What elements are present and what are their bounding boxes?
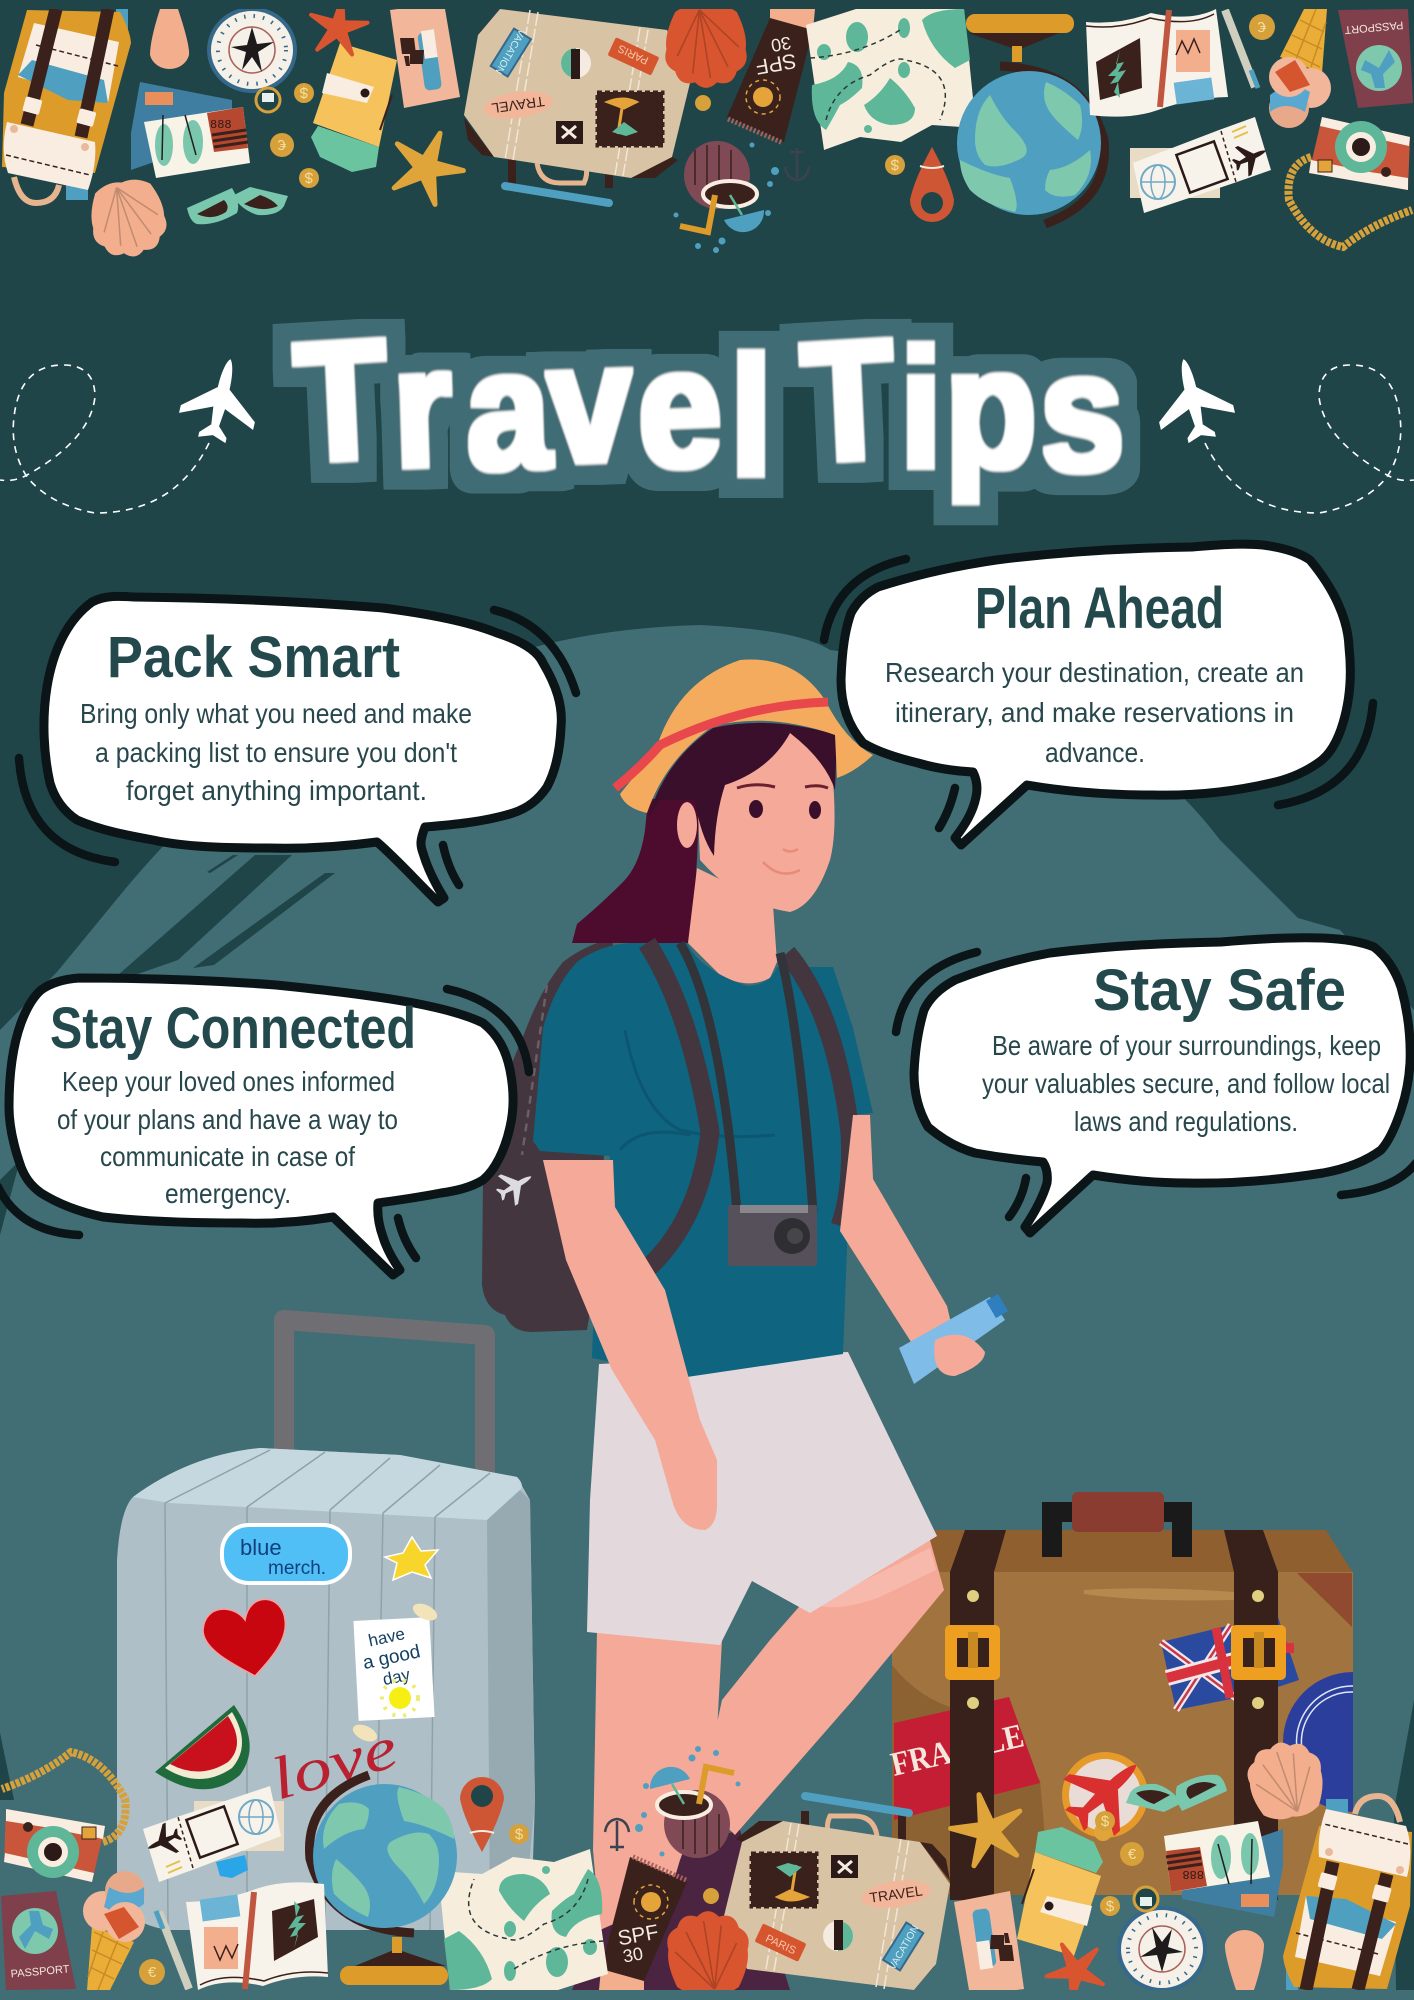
icon: pencil	[1225, 10, 1258, 88]
speech bubble: pack smart	[19, 596, 576, 902]
icon: coconut drink	[635, 1746, 740, 1858]
icon: camera	[1288, 117, 1412, 247]
speech bubble: plan ahead	[824, 544, 1373, 845]
icon: sunscreen tube	[727, 9, 815, 143]
luggage body	[117, 1448, 535, 1930]
icon: compass	[207, 7, 297, 112]
brown suitcase	[887, 1492, 1353, 1900]
speech bubble: stay safe	[896, 938, 1414, 1233]
icon: boarding pass	[141, 1786, 284, 1882]
speech bubble: plan ahead: advance.	[1045, 737, 1145, 768]
icon: camera	[2, 1752, 126, 1882]
icon: coins: €	[148, 1964, 157, 1981]
icon: gold starfish	[392, 130, 466, 207]
long hair	[572, 790, 700, 943]
speech bubble: stay connected: communicate in case of	[100, 1141, 355, 1172]
icon: beach postcard	[1164, 1821, 1283, 1917]
icon: anchor	[785, 148, 809, 180]
speech bubble: plan ahead: itinerary, and make reservations in	[895, 697, 1294, 728]
icon: orange shell	[665, 4, 747, 88]
background hill	[0, 625, 1414, 2000]
icon: wallet	[311, 43, 397, 172]
icon: ice cream	[1269, 9, 1331, 128]
icon: coins: $	[304, 169, 313, 186]
icon: sunscreen tube: SPF	[754, 49, 798, 78]
icon: anchor	[605, 1819, 629, 1851]
speech bubble: stay connected: emergency.	[165, 1178, 291, 1209]
icon: location pin	[910, 147, 954, 222]
speech bubble: stay connected: Stay Connected	[50, 996, 416, 1061]
icon: coins: $	[515, 1826, 524, 1843]
icon: boarding pass	[1130, 117, 1273, 213]
icon: backpack plane charm	[490, 1162, 540, 1210]
sticker: fragile	[887, 1697, 1040, 1820]
icon: map	[438, 1849, 608, 1990]
icon: suitcase with stickers: VACATION	[493, 27, 527, 75]
sticker: fragile: FRAGILE	[887, 1717, 1027, 1784]
icon: peach shell	[91, 180, 166, 256]
speech bubble: pack smart: a packing list to ensure you don't	[95, 737, 457, 768]
strap rivets	[967, 1590, 1264, 1709]
ear	[677, 802, 697, 848]
icon: suitcase with stickers	[724, 1796, 950, 1990]
icon: pencil	[156, 1911, 189, 1989]
icon: suitcase with stickers: TRAVEL	[868, 1882, 924, 1906]
icon: passport	[1, 1891, 76, 1990]
sticker: blue plate	[1283, 1672, 1353, 1812]
hair fringe	[648, 723, 837, 856]
icon: travel journal	[186, 1882, 328, 1990]
left arm	[543, 1160, 717, 1530]
speech bubble: plan ahead: Plan Ahead	[975, 576, 1224, 641]
suitcase body	[915, 1530, 1353, 1573]
bottom decorative travel strip	[1, 1736, 1412, 2000]
icon: peach drop	[1225, 1930, 1264, 1990]
speech bubble: stay safe: Stay Safe	[1093, 958, 1346, 1023]
sticker: blue merch: merch.	[268, 1558, 326, 1579]
icon: suitcase with stickers: PARIS	[616, 42, 651, 66]
sticker: have a good day note: a good	[361, 1641, 422, 1674]
speech bubble: pack smart: forget anything important.	[126, 775, 427, 806]
camera straps	[680, 943, 813, 1212]
icon: suitcase with stickers: PARIS	[763, 1933, 798, 1957]
icon: travel journal	[1086, 9, 1228, 117]
silver luggage	[117, 1320, 535, 1930]
backpack straps	[647, 943, 851, 1269]
backpack	[482, 938, 613, 1332]
icon: passport: PASSPORT	[1344, 18, 1404, 36]
icon: left plane	[175, 351, 267, 448]
icon: wine postcard	[390, 3, 460, 108]
nose and mouth	[763, 849, 800, 874]
shorts	[587, 1352, 937, 1645]
top decorative travel strip	[2, 0, 1413, 263]
icon: beach postcard	[131, 82, 250, 178]
speech bubble: stay connected	[0, 978, 529, 1275]
icon: orange starfish	[1044, 1943, 1108, 2000]
dashed flight path left	[0, 365, 209, 513]
icon: location pin	[460, 1777, 504, 1852]
hill brush streaks	[0, 855, 1414, 1990]
sticker: blue merch: blue	[240, 1535, 282, 1560]
icon: backpack	[1283, 1796, 1412, 1990]
luggage handle	[284, 1320, 485, 1480]
straw hat	[615, 660, 873, 813]
icon: right plane	[1147, 351, 1239, 448]
icon: orange shell	[667, 1911, 749, 1995]
legs	[593, 1540, 944, 1930]
speech bubble: pack smart: Bring only what you need and make	[80, 698, 472, 729]
icon: sunscreen tube: SPF	[616, 1921, 660, 1950]
icon: coins: $	[1101, 1813, 1110, 1830]
speech bubble: stay safe: laws and regulations.	[1074, 1106, 1298, 1137]
strap buckle right	[1231, 1625, 1286, 1680]
icon: sunscreen tube	[599, 1856, 687, 1990]
water bottle	[899, 1294, 1008, 1384]
eyes and brows	[737, 785, 828, 819]
icon: peach shell	[1243, 1736, 1329, 1824]
icon: peach drop	[150, 9, 189, 69]
sticker: love script: love	[263, 1714, 405, 1812]
icon: suitcase with stickers: VACATION	[887, 1924, 921, 1972]
icon: coins: €	[277, 136, 286, 153]
sticker: union flag	[1161, 1617, 1299, 1710]
sticker: plane badge	[1049, 1737, 1162, 1849]
sticker: blue merch	[222, 1525, 350, 1583]
icon: sunscreen tube: 30	[621, 1943, 645, 1967]
sticker: heart	[203, 1599, 285, 1676]
icon: map	[806, 9, 976, 150]
sticker: star	[385, 1537, 438, 1580]
icon: sunglasses	[1126, 1775, 1227, 1812]
speech bubble: stay connected: Keep your loved ones informed	[62, 1066, 395, 1097]
speech bubble: plan ahead: Research your destination, create an	[885, 657, 1304, 688]
icon: backpack	[2, 9, 131, 203]
icon: coconut drink	[674, 141, 779, 253]
icon: gold starfish	[941, 1789, 1032, 1879]
icon: compass	[1117, 1887, 1207, 1992]
icon: orange starfish	[309, 9, 370, 56]
title: Travel Tips	[291, 303, 1126, 511]
sticker: blue patch	[216, 1855, 248, 1878]
dashed flight path right	[1205, 365, 1414, 513]
speech bubble: stay connected: of your plans and have a way to	[57, 1104, 398, 1135]
suitcase handle	[1052, 1492, 1182, 1557]
icon: ice cream	[83, 1871, 145, 1990]
icon: coins: €	[1257, 18, 1266, 35]
traveller character	[482, 660, 1008, 1990]
icon: passport	[1338, 9, 1413, 108]
sticker: have a good day note: have	[367, 1624, 407, 1650]
icon: coins: $	[299, 84, 308, 101]
icon: globe	[957, 14, 1105, 224]
speech bubble: pack smart: Pack Smart	[107, 625, 400, 690]
hand	[934, 1335, 985, 1376]
icon: coins: $	[890, 156, 899, 173]
icon: sunglasses	[187, 187, 288, 224]
right arm	[840, 1115, 955, 1345]
icon: sunscreen tube: 30	[769, 32, 793, 56]
face	[697, 726, 835, 912]
strap buckle left	[945, 1625, 1000, 1680]
icon: coins: €	[1128, 1846, 1137, 1863]
icon: coins: $	[1106, 1898, 1115, 1915]
sticker: have a good day note: day	[381, 1665, 412, 1689]
icon: wine postcard	[954, 1891, 1024, 1996]
icon: passport: PASSPORT	[10, 1963, 70, 1981]
icon: suitcase with stickers: TRAVEL	[490, 93, 546, 117]
icon: wallet	[1017, 1827, 1103, 1956]
t-shirt	[533, 943, 873, 1377]
icon: coins	[270, 14, 1275, 188]
neck	[688, 868, 777, 983]
sticker: have a good day note	[350, 1600, 440, 1745]
suitcase straps	[950, 1530, 1278, 1900]
sticker: watermelon	[155, 1705, 250, 1789]
camera	[728, 1205, 817, 1266]
icon: coins	[139, 1811, 1144, 1985]
shoe shadow	[572, 1830, 790, 1990]
icon: suitcase with stickers	[464, 9, 690, 203]
icon: globe	[309, 1775, 457, 1985]
